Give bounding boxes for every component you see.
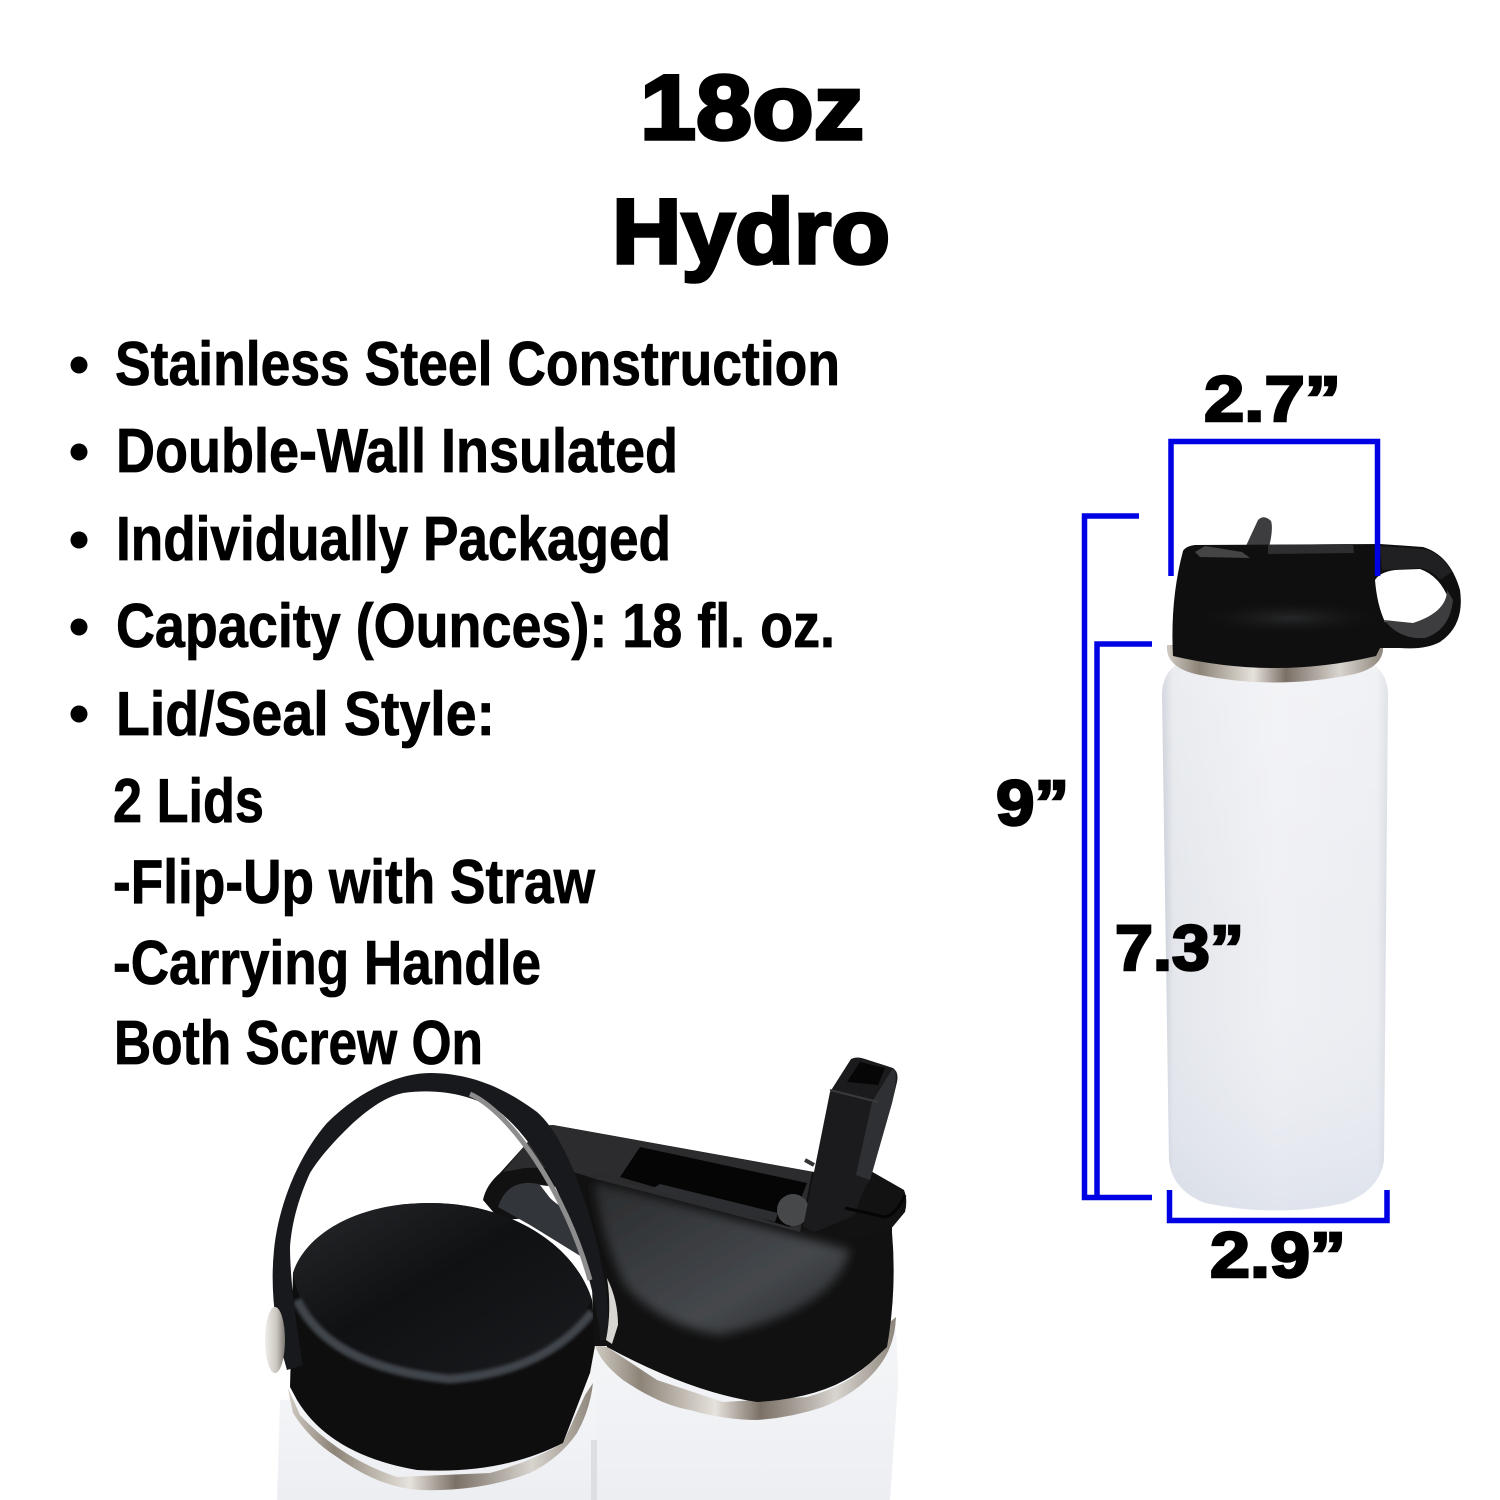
straw lid close-up (483, 1058, 906, 1402)
title (612, 57, 890, 283)
handle opening (498, 1183, 590, 1262)
dimension labels (996, 363, 1346, 1291)
feature list: Double-Wall Insulated (116, 417, 678, 486)
lid lit face (594, 1182, 850, 1335)
feature list: Capacity (Ounces): 18 fl. oz. (116, 592, 835, 661)
feature list: -Flip-Up with Straw (113, 848, 596, 917)
feature list: Stainless Steel Construction (115, 330, 840, 399)
right bottle steel ring (595, 1317, 896, 1420)
product photo: bottle with straw lid (1162, 517, 1461, 1210)
right bottle body (590, 1320, 898, 1500)
dimension labels: 2.9” (1210, 1219, 1346, 1291)
steel rivets (265, 1278, 618, 1373)
dimension labels: 7.3” (1115, 912, 1244, 984)
lid top plane (503, 1125, 812, 1232)
feature list (70, 330, 840, 1078)
photo: two lid close-up (265, 1058, 906, 1500)
title: Hydro (612, 181, 890, 283)
pin and hinge (805, 1160, 814, 1165)
feature list: -Carrying Handle (113, 929, 541, 998)
feature list: 2 Lids (113, 767, 264, 836)
flat loop lid (290, 1203, 611, 1471)
flip-up straw spout (803, 1058, 906, 1237)
straw lid (1172, 517, 1461, 668)
title: 18oz (640, 57, 864, 159)
dimension labels: 9” (996, 767, 1069, 839)
left bottle body (277, 1380, 597, 1500)
dimension labels: 2.7” (1204, 363, 1341, 435)
loop handle strap (273, 1073, 608, 1370)
left bottle steel ring (288, 1383, 593, 1490)
feature list: Lid/Seal Style: (116, 680, 495, 749)
dimension lines (1084, 442, 1387, 1220)
steel neck ring (1167, 645, 1383, 682)
bottle body (1162, 662, 1388, 1210)
feature list: Both Screw On (114, 1009, 483, 1078)
feature list: Individually Packaged (116, 505, 671, 574)
drinking slot (620, 1147, 807, 1227)
